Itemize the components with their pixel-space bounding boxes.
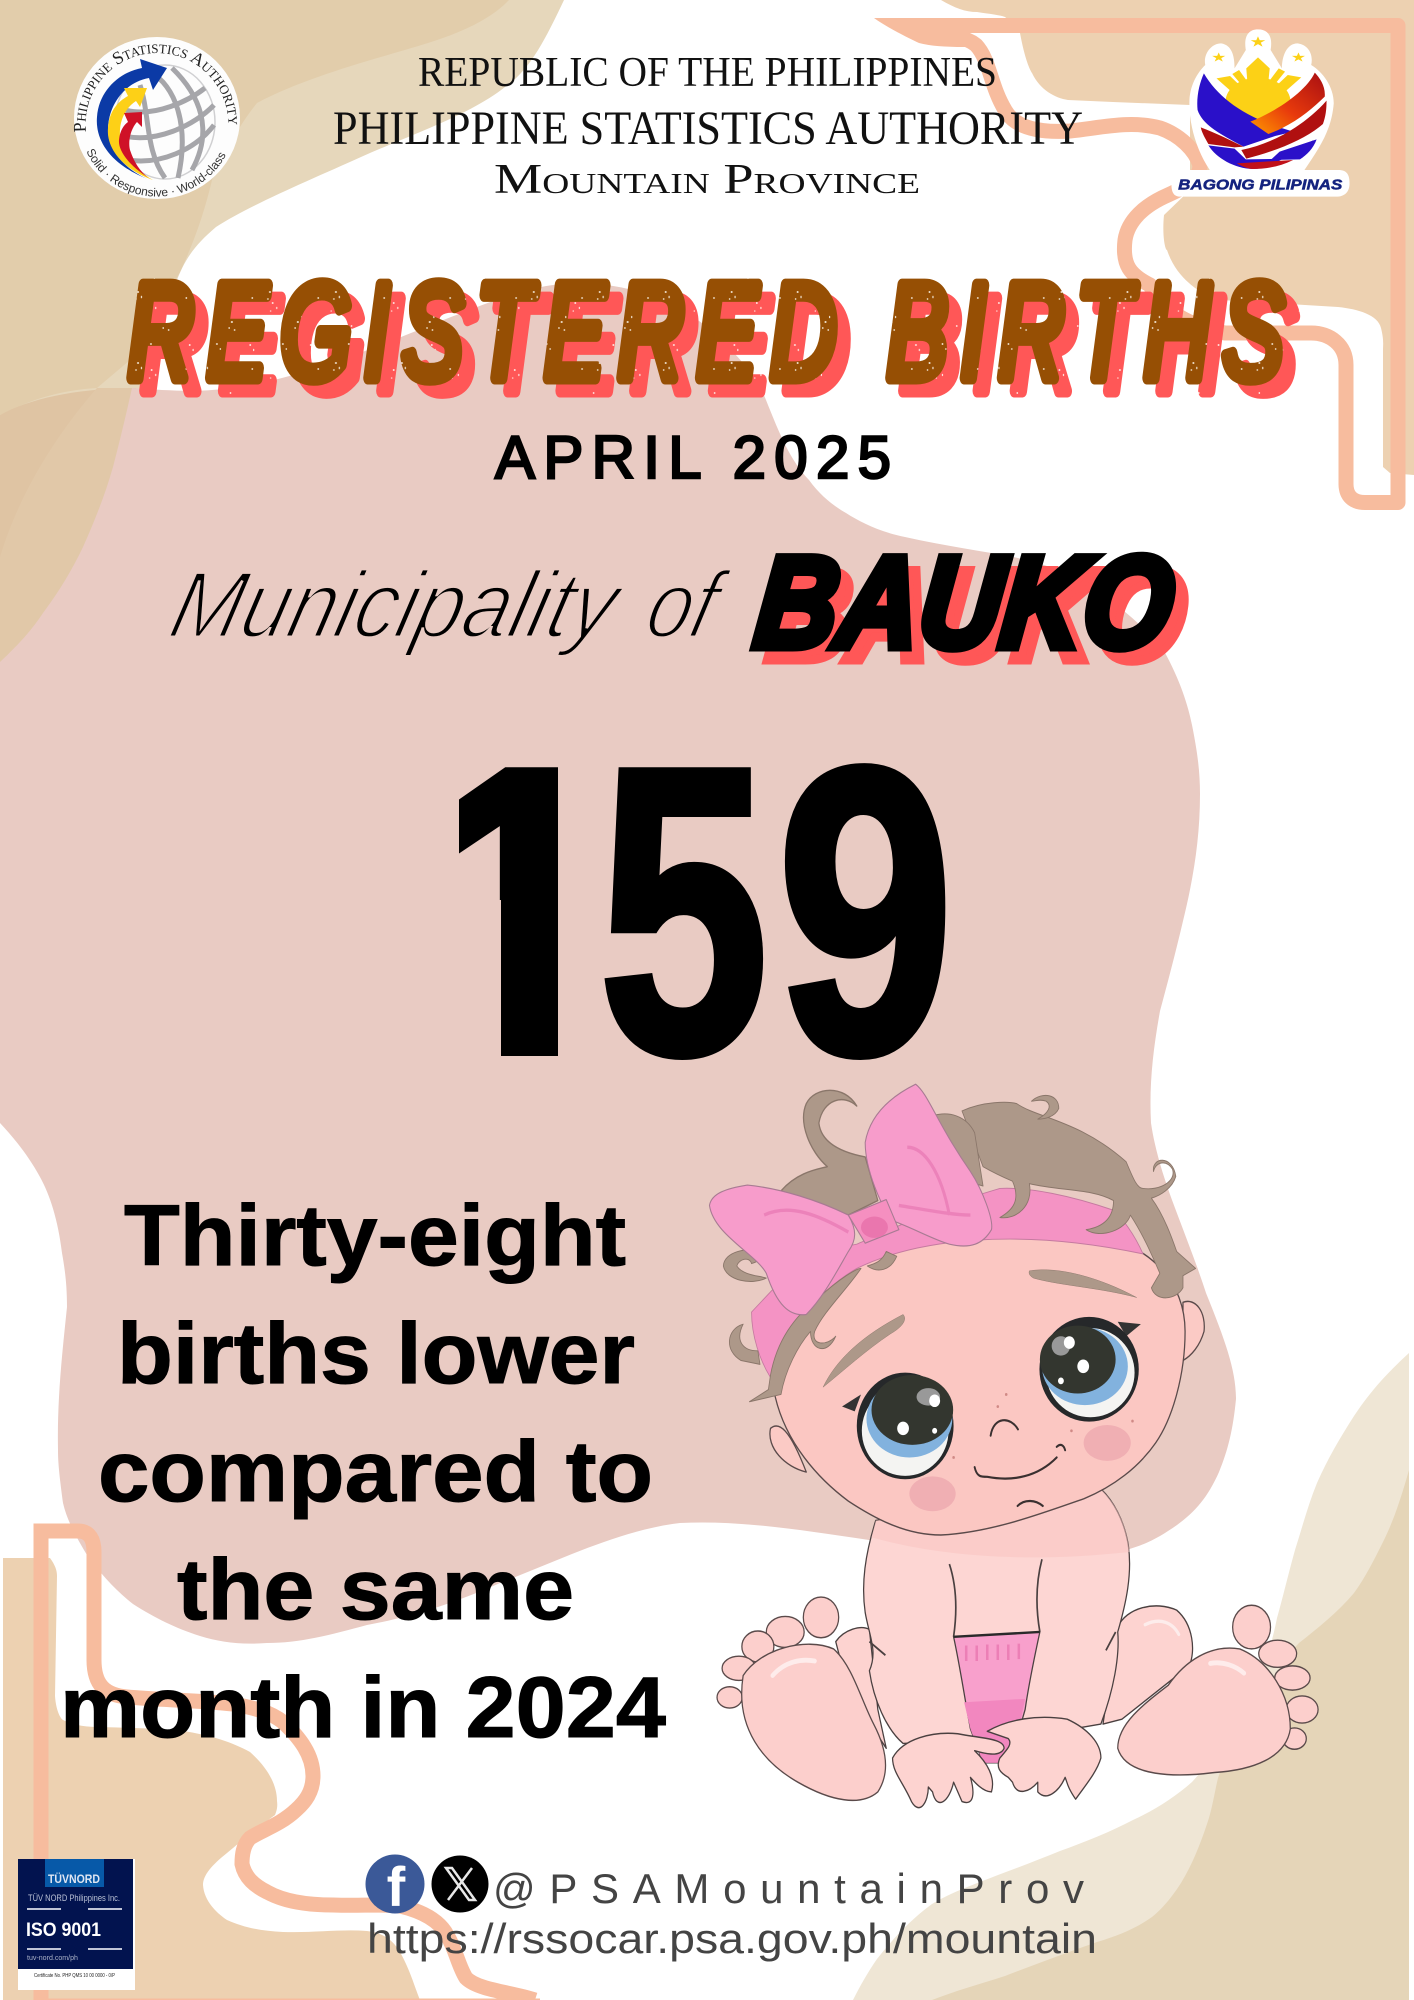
bottom-left tan shape (3, 1558, 420, 2000)
badge navy panel (18, 1859, 133, 1969)
bottom-right dark tan shape (932, 1470, 1409, 2000)
logo: Bagong Pilipinas (1171, 29, 1350, 197)
line 4: the same (177, 1542, 574, 1638)
title: registered births (128, 258, 1297, 420)
left dark tan shape (0, 388, 150, 672)
lower blue (1208, 140, 1313, 169)
digit 1: 1 (415, 684, 626, 1139)
seal text (86, 53, 228, 132)
decorative peach line: top-right (874, 18, 1398, 502)
logo caption: BAGONG PILIPINAS (1178, 176, 1343, 193)
cheeks (909, 1476, 956, 1511)
header line 2: PHILIPPINE STATISTICS AUTHORITY (333, 102, 1083, 155)
logo: Bagong Pilipinas: ★ (1291, 51, 1306, 65)
right eye (1039, 1317, 1141, 1422)
municipality name (749, 529, 1193, 688)
logo: Philippine Statistics Authority seal (74, 37, 240, 199)
headband (752, 1188, 1143, 1377)
right hand (987, 1717, 1101, 1799)
thigh highlight (1145, 1621, 1179, 1634)
back hair (781, 1090, 878, 1215)
top-right tan shape (941, 0, 1414, 475)
big number (459, 763, 946, 1060)
diaper (954, 1632, 1040, 1763)
bow (709, 1084, 992, 1315)
digit 9: 9 (777, 684, 954, 1139)
bottom red band (1237, 160, 1293, 169)
sun and rays (1217, 57, 1301, 126)
logo: Bagong Pilipinas: ★ (1211, 51, 1226, 65)
icon: facebook (366, 1854, 424, 1918)
hair right (962, 1102, 1196, 1298)
line 2: births lower (117, 1306, 635, 1402)
right thigh (1103, 1606, 1193, 1724)
statement text (60, 1188, 666, 1756)
website: https://rssocar.psa.gov.ph/mountain (367, 1915, 1097, 1962)
bottom-right light tan shape (853, 1353, 1409, 2000)
arm lines (869, 1559, 1116, 1655)
icon: X (432, 1856, 488, 1912)
globe (115, 65, 215, 179)
freckles (954, 1394, 1133, 1457)
logo: Philippine Statistics Authority seal: Philippine Statistics Authority (74, 44, 238, 132)
hair left strand and curls (723, 1250, 897, 1402)
stars: ★ (1250, 34, 1267, 50)
title main: REGISTERED BIRTHS (128, 258, 1284, 407)
torso tint over blob (872, 1489, 1130, 1557)
left subtle tan strip (0, 388, 150, 672)
illustration: baby (709, 1084, 1318, 1808)
name main: BAUKO (749, 529, 1180, 675)
municipality label (161, 553, 736, 658)
middle red band (1241, 101, 1327, 159)
nose and mouth (975, 1420, 1065, 1506)
badge blue head (45, 1859, 104, 1887)
brows (823, 1270, 1137, 1387)
icon: facebook: f (387, 1855, 406, 1918)
word: Municipality: Municipality (161, 553, 634, 658)
logo white backing (1171, 29, 1350, 197)
lower-left red band (1201, 127, 1244, 147)
right foot (1118, 1605, 1318, 1775)
social media row (366, 1854, 1097, 1962)
digit 5: 5 (599, 684, 769, 1139)
line 1: Thirty-eight (124, 1188, 626, 1284)
upper blue band (1197, 73, 1293, 147)
hair top curl (1031, 1095, 1059, 1119)
diaper lower shade (964, 1699, 1025, 1763)
brand text: TÜVNORD (48, 1871, 100, 1886)
left thigh (836, 1628, 886, 1748)
logo: Philippine Statistics Authority seal: Solid · Responsive · World-class (87, 149, 226, 197)
header line 1: REPUBLIC OF THE PHILIPPINES (418, 50, 997, 96)
ears (770, 1301, 1204, 1472)
upper red band (1250, 73, 1325, 134)
line 5: month in 2024 (60, 1660, 666, 1756)
site text: tuv-nord.com/ph (27, 1955, 78, 1962)
torso (864, 1489, 1130, 1743)
top-left light tan shape (0, 0, 564, 672)
hair under bow (933, 1114, 983, 1186)
header text (333, 50, 1083, 203)
certification badge (18, 1859, 135, 1990)
title shadow: REGISTERED BIRTHS (141, 271, 1297, 420)
social handle: @PSAMountainProv (493, 1865, 1084, 1912)
diaper waist line (954, 1632, 1040, 1637)
standard text: ISO 9001 (26, 1920, 101, 1941)
decorative peach line: bottom-left (41, 1531, 540, 2000)
company text: TÜV NORD Philippines Inc. (28, 1893, 120, 1903)
badge white base (18, 1859, 135, 1990)
pink central blob (0, 283, 1236, 1644)
rule (27, 1909, 122, 1949)
word: of: of (637, 553, 736, 658)
diaper ribbing (966, 1644, 1019, 1661)
date subtitle: APRIL 2025 (495, 424, 891, 491)
head (775, 1234, 1185, 1535)
line 3: compared to (98, 1424, 653, 1520)
name shadow: BAUKO (762, 542, 1193, 688)
left hand (893, 1733, 1004, 1808)
arrows: blue yellow red (97, 59, 167, 180)
left eye (842, 1373, 954, 1479)
header line 3: Mountain Province (494, 157, 920, 203)
certificate text: Certificate No. PHP QMS 10 00 0000 - 0/P (34, 1973, 116, 1979)
top-left mid tan shape (0, 0, 509, 415)
left foot (717, 1597, 885, 1800)
